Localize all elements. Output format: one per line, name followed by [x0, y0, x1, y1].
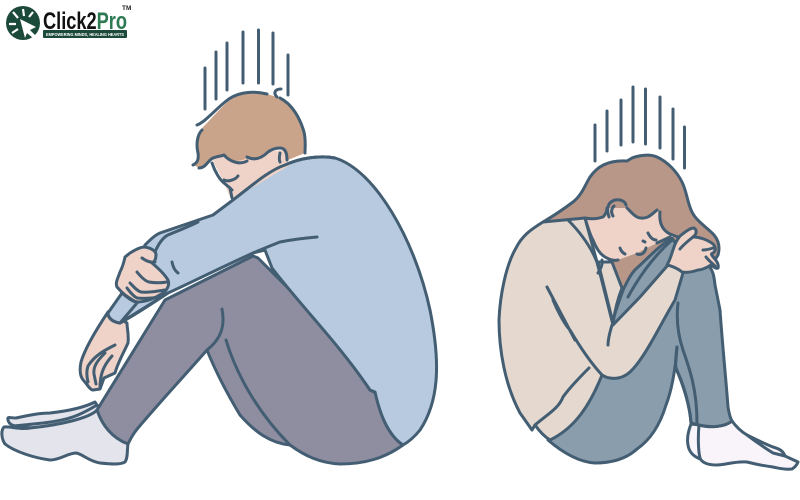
man back foot [8, 402, 100, 430]
man lower hand [80, 312, 128, 390]
gloom lines above man [205, 30, 288, 109]
woman sweater [499, 218, 683, 440]
logo: Click2Pro [6, 5, 131, 40]
man shoulder line over face [233, 157, 335, 200]
woman back sock [688, 424, 700, 459]
man ear and cowlick [275, 89, 281, 162]
man eye and nose [224, 176, 238, 190]
woman hair [543, 155, 719, 300]
woman sweater folds and collar [535, 220, 672, 425]
man upper hand [116, 247, 169, 302]
woman face [585, 200, 690, 260]
man lower arm and shirt [108, 157, 437, 445]
woman eyes, nose and mouth [620, 233, 656, 255]
man trouser creases [207, 309, 290, 445]
woman sock [698, 421, 798, 469]
woman hand [667, 228, 718, 272]
woman far leg [612, 238, 732, 427]
icon: cursor with rays [6, 6, 40, 40]
gloom lines above woman [595, 87, 684, 168]
logo wordmark: Click2Pro [43, 8, 127, 35]
trademark: TM [122, 5, 131, 12]
woman near thigh [548, 320, 677, 463]
man cuff [108, 293, 137, 323]
figure: man sitting with head down [2, 30, 437, 464]
woman chest under chin [598, 262, 622, 323]
woman ear [608, 200, 626, 217]
man head [193, 89, 305, 199]
man trousers [97, 256, 403, 464]
man hair outline [193, 92, 305, 168]
logo tagline bar: EMPOWERING MINDS, HEALING HEARTS [46, 32, 124, 37]
figure: woman curled up with head on knees [499, 87, 798, 469]
woman leg lines [676, 303, 697, 423]
man sleeve folds [155, 222, 317, 273]
man hair [193, 92, 305, 168]
man face [210, 150, 290, 199]
man front foot [2, 410, 128, 464]
